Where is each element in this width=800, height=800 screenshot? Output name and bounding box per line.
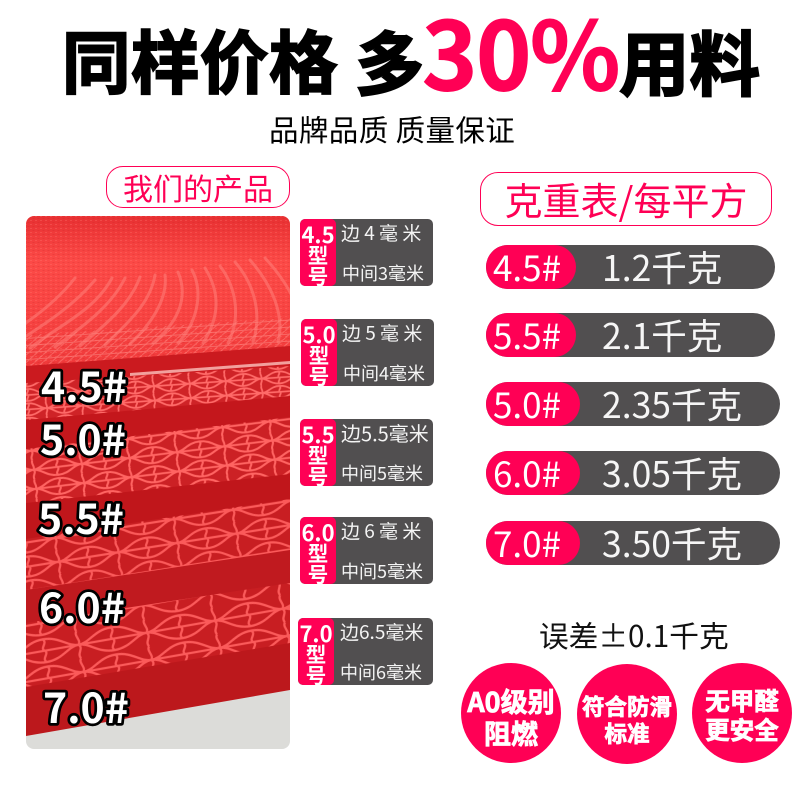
spec tag 5.0 (301, 319, 434, 386)
weight row 5.5: 2.1千克 (602, 309, 722, 360)
badge: anti-slip standard (577, 664, 677, 764)
floor (26, 690, 290, 749)
mesh layer 4 (26, 583, 290, 688)
thickness labels (38, 354, 129, 735)
top sheet edge (26, 346, 290, 384)
spec tag 5.5: 型 (308, 439, 328, 469)
mesh layer 1 (26, 366, 290, 421)
spec tag 6.0 (300, 517, 433, 584)
spec tag 6.0: 中间5毫米 (341, 558, 423, 584)
badge: formaldehyde free: 无甲醛 (705, 683, 779, 718)
heading: weight table: 克重表/每平方 (505, 171, 747, 226)
title (62, 0, 760, 118)
badge: flame retardant: 阻燃 (484, 713, 538, 752)
weight row 7.0: 3.50千克 (602, 517, 742, 568)
spec tag 4.5: 型 (308, 239, 328, 269)
weight row 6.0: 6.0# (493, 447, 561, 498)
spec tag 5.5 (300, 419, 433, 486)
badge: anti-slip standard: 符合防滑 (582, 690, 672, 722)
tolerance note: 误差±0.1千克 (539, 613, 729, 656)
title: 用料 (619, 9, 760, 111)
badge: anti-slip standard: 标准 (604, 717, 650, 749)
weight row 4.5: 1.2千克 (602, 241, 722, 292)
weight row 7.0: 7.0# (493, 517, 561, 568)
sheet edge 2 (26, 396, 290, 450)
weight row 6.0: 3.05千克 (602, 447, 742, 498)
spec tag 7.0: 型 (306, 638, 326, 668)
weight row 5.0: 2.35千克 (602, 378, 742, 429)
sheet edge 5 (26, 643, 290, 736)
label 4.5#: 4.5# (41, 354, 127, 414)
mesh layer 3 (26, 499, 290, 591)
spec tag 6.0: 边 6 毫 米 (341, 517, 421, 544)
badge: formaldehyde free: 更安全 (705, 712, 779, 747)
spec tag 4.5: 边 4 毫 米 (341, 219, 421, 246)
mesh layer 2 (26, 417, 290, 504)
badge: flame retardant (461, 663, 561, 763)
spec tag 7.0: 边6.5毫米 (340, 618, 423, 645)
weight row 6.0 (486, 451, 780, 495)
label 6.0#: 6.0# (39, 575, 125, 635)
spec tag 5.5: 中间5毫米 (341, 460, 423, 486)
title: 多 (355, 9, 424, 109)
weight row 5.0: 5.0# (493, 378, 561, 429)
spec tag 7.0 (298, 618, 433, 685)
label 7.0#: 7.0# (43, 675, 129, 735)
spec tag 5.0: 型 (309, 339, 329, 369)
spec tag 5.0: 边 5 毫 米 (342, 319, 422, 346)
sheet edge 4 (26, 550, 290, 624)
weight row 4.5: 4.5# (493, 241, 561, 292)
weight row 7.0 (486, 521, 780, 565)
spec tag 6.0: 型 (308, 537, 328, 567)
top sheet surface (26, 216, 290, 366)
spec tag 5.0: 中间4毫米 (343, 360, 425, 386)
subtitle: 品牌品质 质量保证 (269, 108, 515, 150)
badge: flame retardant: A0级别 (467, 681, 555, 720)
title: 同样价格 (62, 9, 338, 108)
spec tag 7.0: 中间6毫米 (340, 659, 422, 685)
product photo with thickness labels (26, 216, 290, 749)
weight row 5.5 (486, 313, 775, 357)
label 5.5#: 5.5# (38, 486, 124, 546)
weight row 5.0 (486, 382, 780, 426)
heading: our products: 我们的产品 (123, 165, 273, 209)
spec tag 4.5: 中间3毫米 (342, 260, 424, 286)
sheet edge 3 (26, 474, 290, 540)
weight row 5.5: 5.5# (493, 309, 561, 360)
weight row 4.5 (486, 245, 775, 289)
spec tag 4.5 (300, 219, 433, 286)
label 5.0#: 5.0# (40, 407, 126, 467)
badge: formaldehyde free (692, 663, 792, 763)
